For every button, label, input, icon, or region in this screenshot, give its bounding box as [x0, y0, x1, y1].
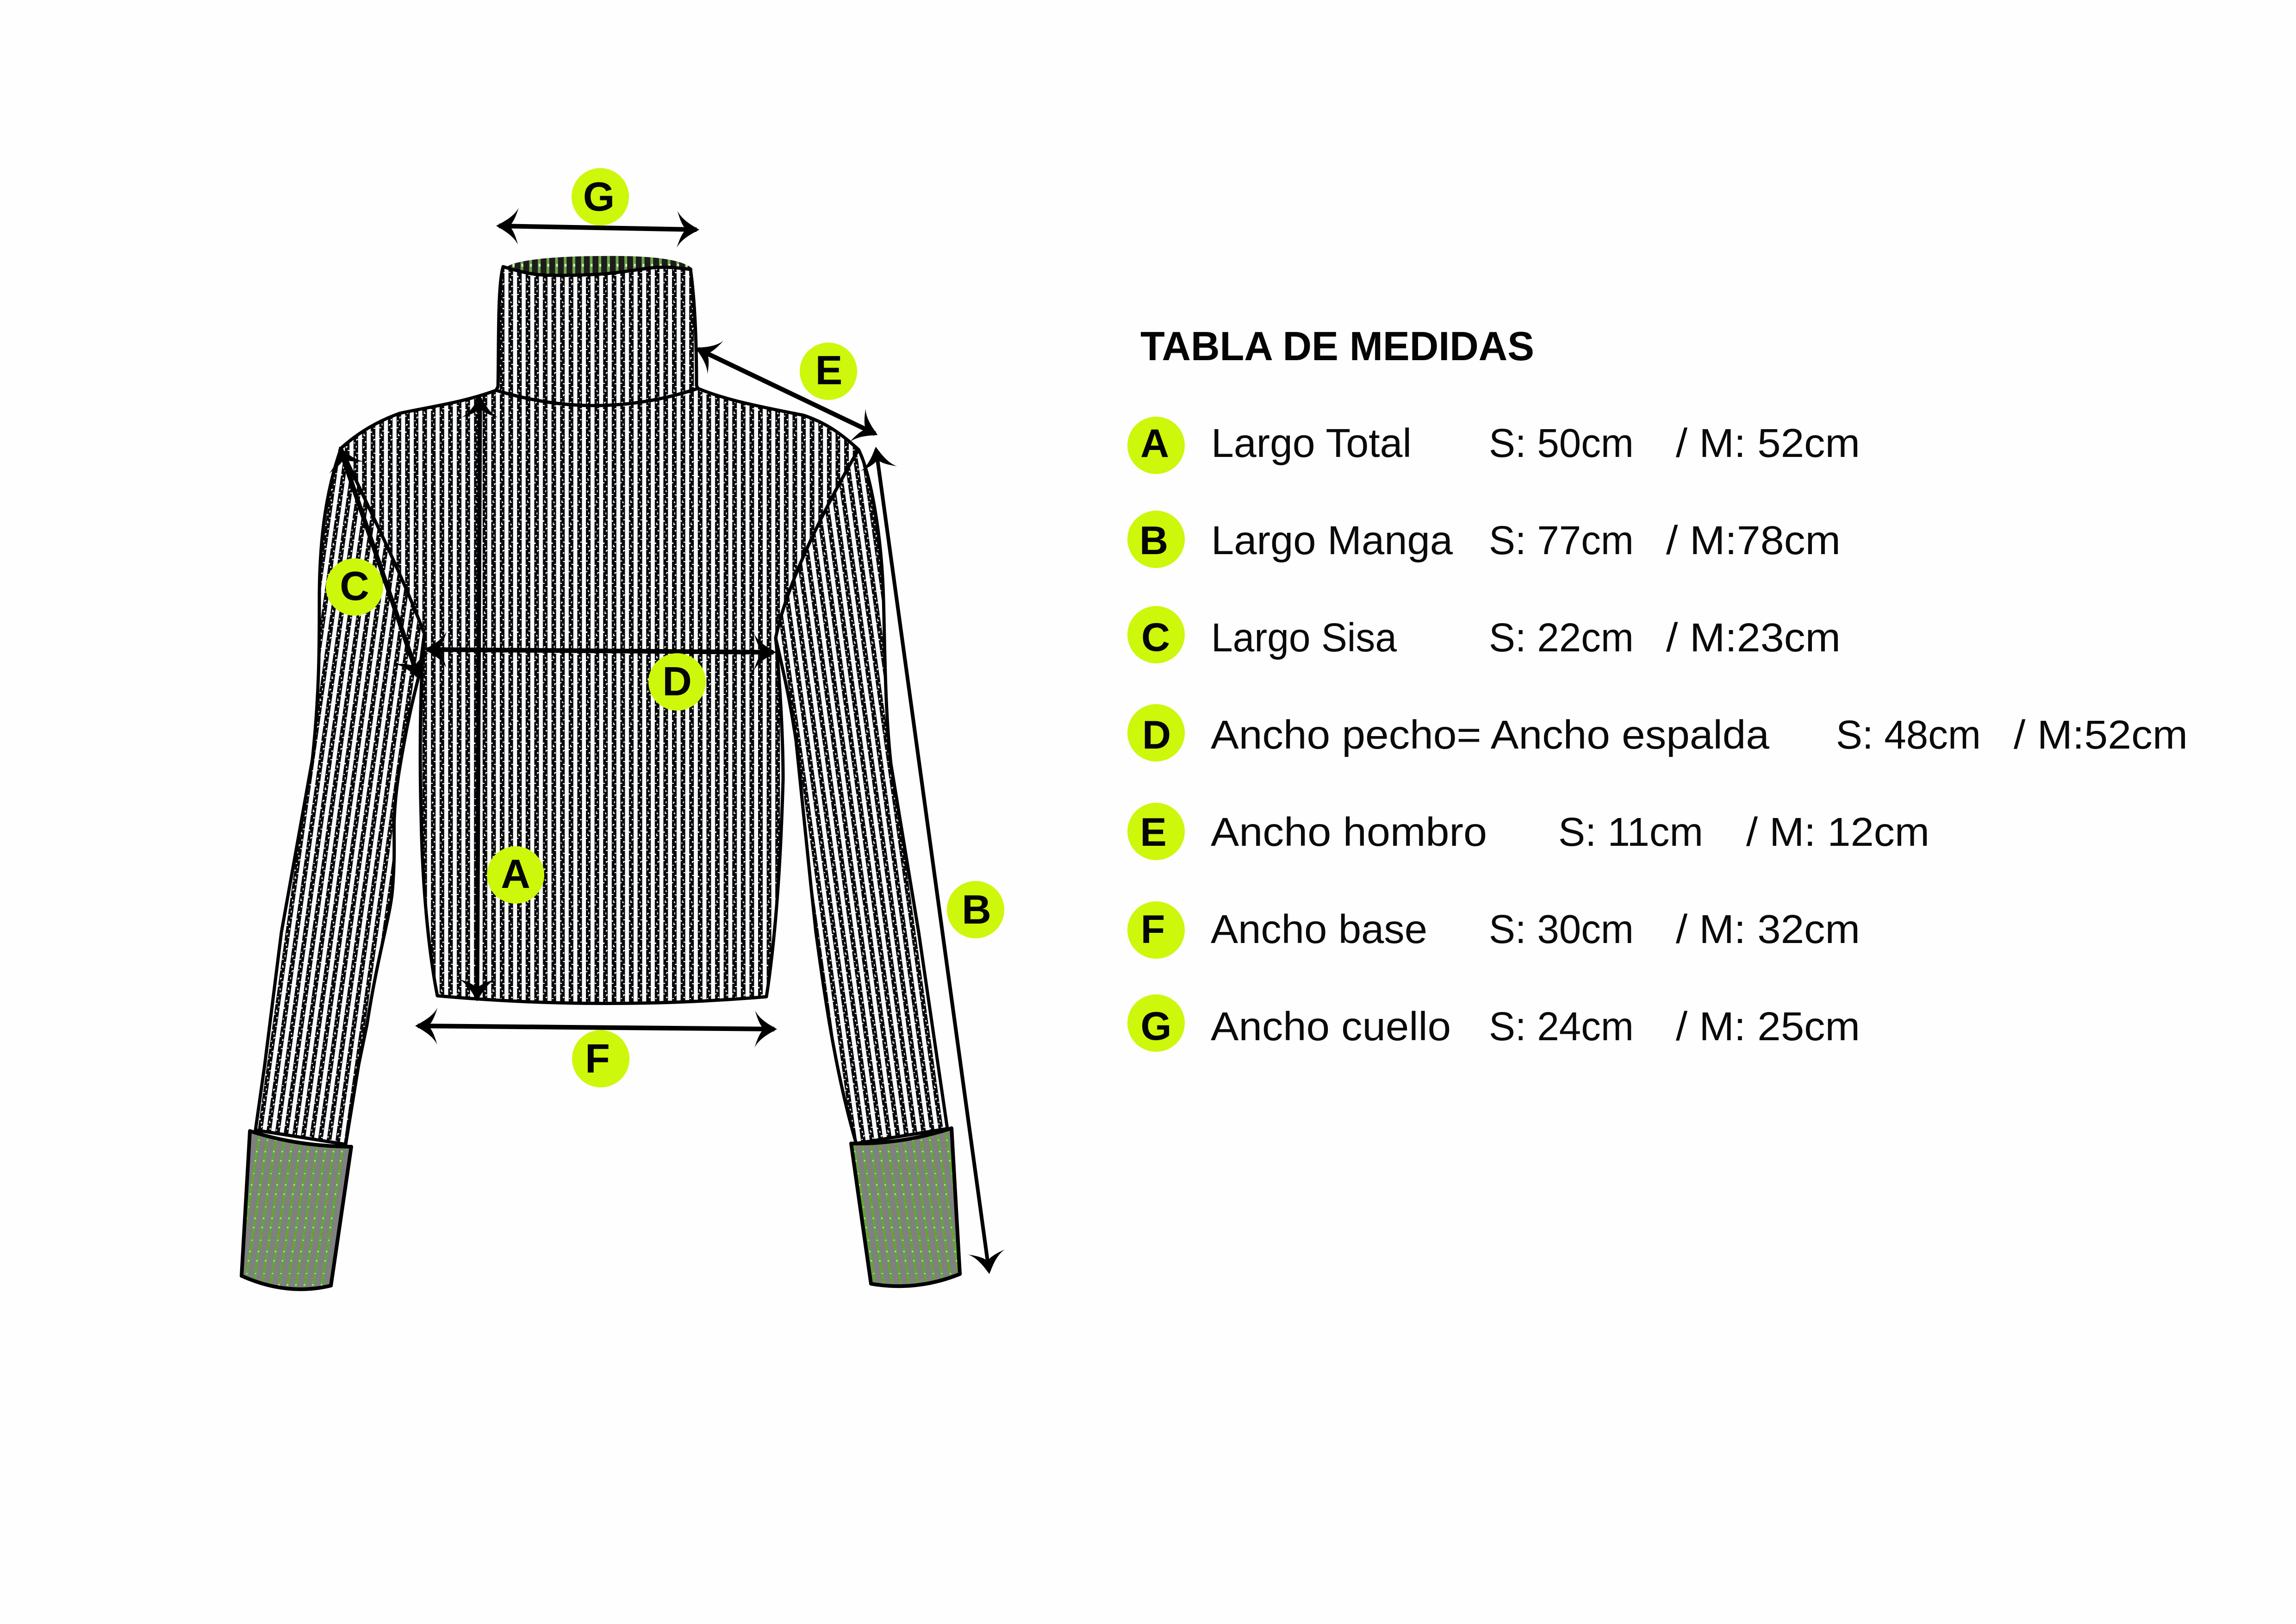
row E: Ancho hombro	[1211, 810, 1487, 855]
row E: / M: 12cm	[1746, 810, 1929, 855]
row C: Largo Sisa	[1211, 615, 1397, 660]
turtleneck collar	[496, 267, 698, 406]
row E: S: 11cm	[1558, 810, 1703, 855]
badge F	[572, 1030, 629, 1087]
row D: Ancho pecho= Ancho espalda	[1211, 712, 1770, 757]
row A: A	[1140, 421, 1169, 466]
row C: / M:23cm	[1666, 615, 1841, 660]
badge B	[947, 881, 1004, 938]
badge A	[487, 846, 544, 904]
badge A: A	[501, 851, 530, 897]
row C: S: 22cm	[1489, 615, 1634, 660]
badge E	[800, 343, 857, 400]
row B: / M:78cm	[1666, 518, 1841, 563]
measurement arrows	[340, 226, 989, 1271]
arrow F: base width	[418, 1026, 774, 1029]
arrow D: chest width	[427, 650, 773, 652]
measurements table	[1127, 417, 2188, 1052]
arrow G: neck width	[499, 226, 697, 230]
garment: ribbed turtleneck sweater	[242, 256, 960, 1289]
row G: / M: 25cm	[1676, 1004, 1860, 1049]
row G	[1127, 994, 1860, 1052]
body	[341, 388, 859, 1004]
arrow A: total length	[477, 398, 480, 999]
arrow B: sleeve length	[876, 450, 989, 1271]
arrow C: armhole	[340, 449, 418, 676]
row A	[1127, 417, 1860, 474]
right cuff	[851, 1128, 960, 1286]
row D	[1127, 704, 2188, 762]
left cuff	[242, 1131, 351, 1289]
row F	[1127, 901, 1860, 959]
title: TABLA DE MEDIDAS	[1140, 323, 1534, 369]
row C	[1127, 606, 1841, 663]
row F: / M: 32cm	[1676, 907, 1860, 952]
row G: Ancho cuello	[1211, 1004, 1451, 1049]
row E	[1127, 803, 1929, 860]
neck opening	[508, 256, 692, 278]
left sleeve	[255, 448, 424, 1144]
row F: Ancho base	[1211, 907, 1427, 952]
row F: F	[1141, 907, 1165, 952]
row B	[1127, 511, 1841, 568]
right sleeve	[776, 450, 947, 1143]
row F: S: 30cm	[1489, 907, 1634, 952]
badge G	[572, 168, 629, 225]
row E: E	[1140, 810, 1167, 855]
badge B: B	[962, 887, 991, 932]
row G: S: 24cm	[1489, 1004, 1634, 1049]
arrow E: shoulder width	[698, 349, 875, 434]
row G: G	[1141, 1004, 1171, 1049]
badge D: D	[662, 658, 692, 704]
badge D	[648, 653, 706, 711]
row A: S: 50cm	[1489, 421, 1634, 466]
row C: C	[1141, 615, 1170, 660]
row D: / M:52cm	[2014, 712, 2188, 757]
row A: / M: 52cm	[1676, 421, 1860, 466]
row B: Largo Manga	[1211, 518, 1453, 563]
row B: S: 77cm	[1489, 518, 1634, 563]
row D: S: 48cm	[1836, 712, 1981, 757]
row B: B	[1139, 518, 1168, 563]
row A: Largo Total	[1211, 421, 1412, 466]
badge G: G	[583, 174, 615, 219]
row D: D	[1142, 713, 1171, 757]
badge C: C	[340, 563, 369, 609]
diagram letter badges	[326, 168, 1004, 1087]
badge C	[326, 558, 383, 616]
badge F: F	[585, 1036, 610, 1081]
badge E: E	[815, 347, 842, 393]
